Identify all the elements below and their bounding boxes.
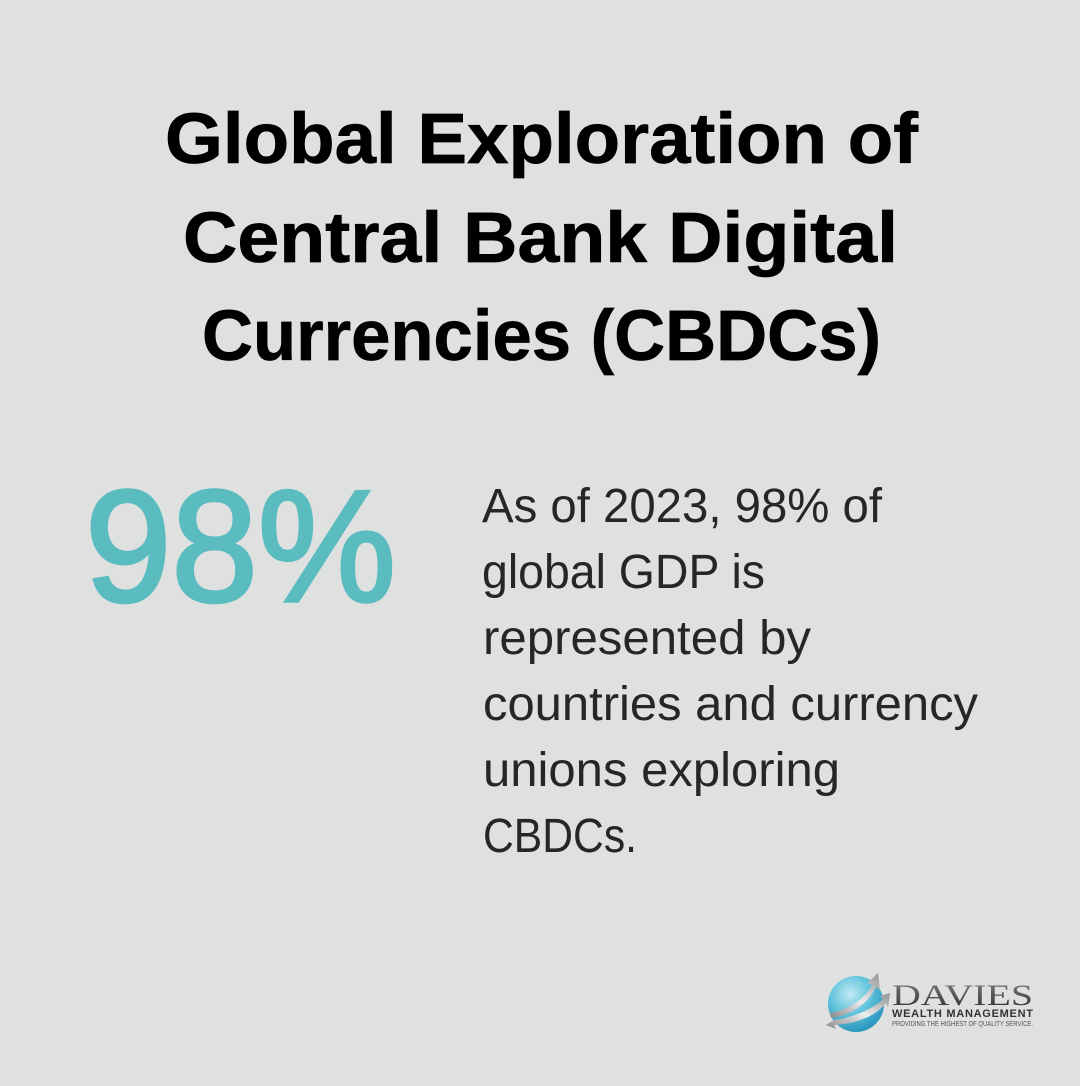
title <box>165 100 918 376</box>
description text <box>482 480 978 863</box>
slogan: PROVIDING THE HIGHEST OF QUALITY SERVICE. <box>892 1021 1033 1028</box>
wordmark: DAVIES <box>892 979 1033 1012</box>
description text: represented by <box>483 612 811 665</box>
logo: Davies Wealth Management <box>826 973 1033 1032</box>
title: Currencies (CBDCs) <box>202 297 881 376</box>
description text: As of 2023, 98% of <box>482 480 883 533</box>
description text: unions exploring <box>483 744 840 797</box>
description text: global GDP is <box>482 546 765 599</box>
description text: countries and currency <box>483 678 978 731</box>
tagline: WEALTH MANAGEMENT <box>892 1008 1033 1020</box>
title: Global Exploration of <box>165 100 918 179</box>
description text: CBDCs. <box>483 810 637 863</box>
icon: globe with arrows <box>826 973 890 1032</box>
big statistic: 98%: 98% <box>85 457 396 635</box>
title: Central Bank Digital <box>183 199 898 278</box>
